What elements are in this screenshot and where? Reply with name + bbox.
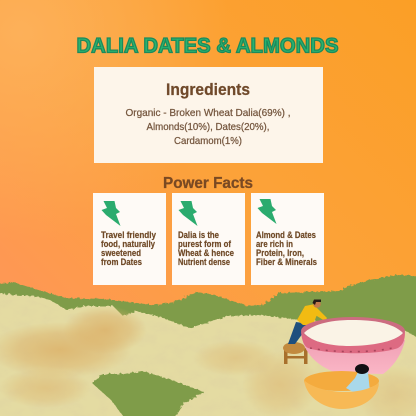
- fact text 1: Travel friendly: [101, 230, 156, 240]
- panel: ingredients: [94, 67, 323, 163]
- green patch in sand: [92, 371, 204, 416]
- fact text 3: are rich in: [256, 239, 293, 249]
- panel: fact card 2: [172, 193, 245, 285]
- bowl decorated band: [301, 332, 405, 353]
- bowl rim outer: [301, 317, 405, 345]
- sand mottling: [0, 300, 416, 416]
- fact text 1: food, naturally: [101, 239, 155, 249]
- sand blotches: [0, 322, 132, 378]
- title: DALIA DATES & ALMONDS: [76, 34, 338, 58]
- ingredients list: Almonds(10%), Dates(20%),: [146, 121, 270, 133]
- panel: fact card 3: [251, 193, 324, 285]
- stool: [283, 342, 308, 364]
- fact text 2: purest form of: [178, 239, 231, 249]
- fact text 3: Almond & Dates: [256, 230, 316, 240]
- green hills: [0, 275, 416, 360]
- fact text 1: from Dates: [101, 257, 142, 267]
- man: head: [313, 300, 321, 308]
- fact text 2: [178, 230, 234, 267]
- fact text 3: Protein, Iron,: [256, 248, 304, 258]
- bowl body: [303, 340, 405, 374]
- icon: lightning bolt 1: [102, 201, 120, 226]
- fact text 2: Wheat & hence: [178, 248, 234, 258]
- ingredients heading: Ingredients: [166, 80, 250, 99]
- ingredients list: [126, 107, 290, 147]
- yellow bowl body: [304, 380, 379, 409]
- man: arm: [312, 306, 327, 321]
- ingredients list: Organic - Broken Wheat Dalia(69%) ,: [126, 107, 290, 119]
- illustration: pink bowl: [301, 317, 405, 374]
- fact text 1: [101, 230, 156, 267]
- fact text 3: Fiber & Minerals: [256, 257, 317, 267]
- sand field: [0, 293, 416, 416]
- ingredients list: Cardamom(1%): [174, 135, 242, 147]
- girl: hair: [355, 364, 369, 374]
- ingredients paper background: [94, 67, 323, 163]
- heading: power facts: Power Facts: [163, 175, 253, 192]
- fact text 2: Dalia is the: [178, 230, 219, 240]
- yellow bowl interior: [304, 371, 379, 391]
- illustration: man on stool: [283, 300, 327, 364]
- fact text 1: sweetened: [101, 248, 141, 258]
- man: hair: [312, 300, 321, 305]
- fact text 2: Nutrient dense: [178, 257, 230, 267]
- panel: fact card 1: [93, 193, 166, 285]
- illustration: yellow bowl with girl: [304, 364, 379, 409]
- fact text 3: [256, 230, 317, 267]
- icon: lightning bolt 3: [258, 199, 276, 224]
- icon: lightning bolt 2: [178, 201, 198, 226]
- man: trousers: [288, 322, 309, 344]
- man: shirt: [297, 304, 318, 325]
- band pattern: [310, 347, 396, 352]
- flour in bowl: [304, 320, 403, 346]
- girl: dress: [346, 372, 370, 393]
